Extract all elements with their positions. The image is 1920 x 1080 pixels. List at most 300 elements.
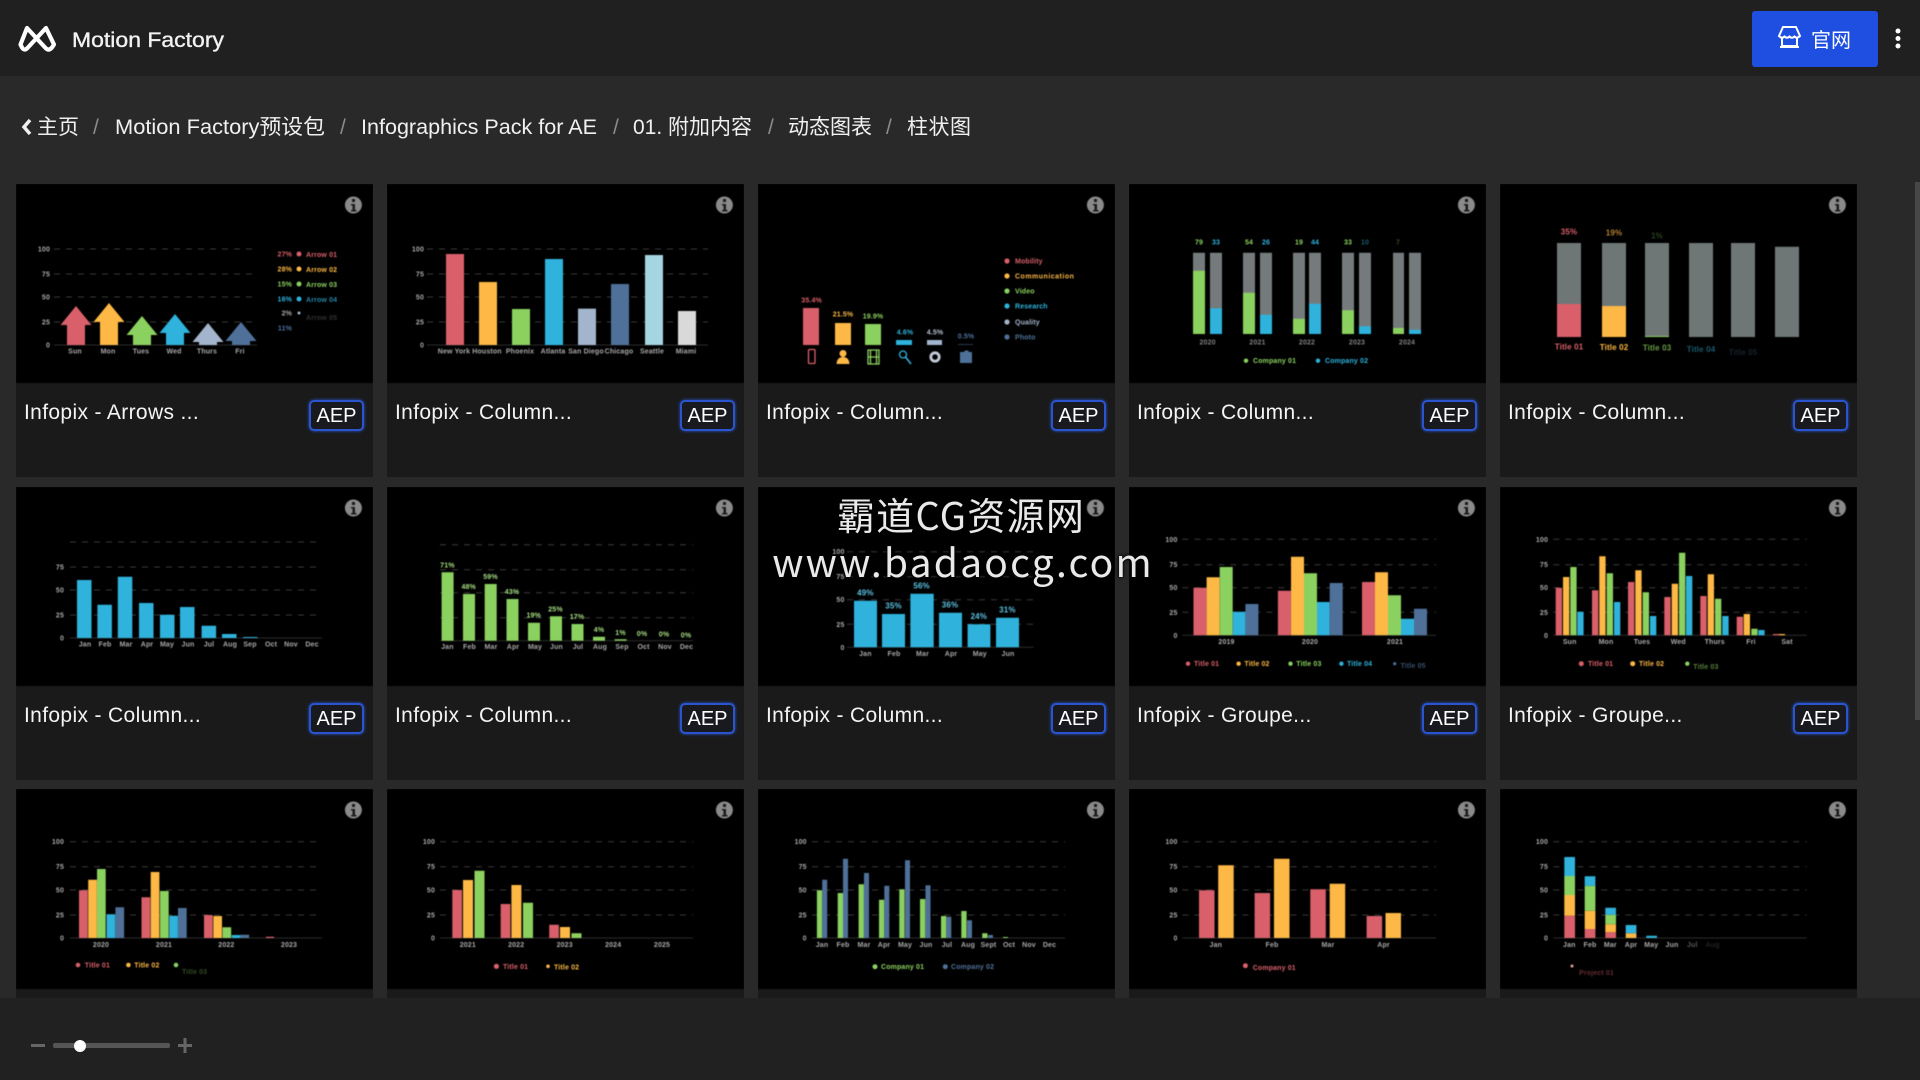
x axis labels: Fri [235, 348, 245, 356]
card: paired monthly columns [758, 789, 1115, 1080]
breadcrumb: 柱状图 [907, 116, 971, 139]
AEP badge [1051, 703, 1106, 734]
value labels: 10 [1361, 240, 1369, 246]
card: six-month blue columns [758, 487, 1115, 780]
month labels: Feb [1266, 942, 1278, 949]
percentage labels [857, 582, 1016, 621]
legend [1243, 963, 1296, 972]
thumbnail: paired progress columns by year [1129, 184, 1486, 383]
icon: info [1829, 500, 1846, 516]
y axis labels: 25 [42, 320, 50, 326]
percentage labels: 4.5% [927, 330, 944, 336]
month labels: Apr [1625, 942, 1637, 949]
y axis labels: 50 [427, 888, 435, 894]
y axis labels: 25 [416, 320, 424, 326]
card: grouped columns by year [1129, 487, 1486, 780]
month labels: Feb [1584, 942, 1596, 949]
percentage labels: 1% [615, 630, 626, 637]
legend: Photo [1015, 334, 1036, 342]
card: grouped columns by weekday [1500, 487, 1857, 780]
x axis labels: Miami [676, 348, 696, 356]
month labels: May [528, 644, 542, 651]
legend [1004, 258, 1074, 342]
y axis labels: 50 [416, 294, 424, 302]
legend: Title 01 [1194, 661, 1219, 668]
month labels: May [1644, 942, 1658, 949]
legend: Title 04 [1347, 661, 1372, 668]
legend [278, 252, 337, 332]
column titles: Title 02 [1600, 343, 1629, 352]
column titles: Title 04 [1687, 345, 1716, 354]
legend [1579, 661, 1719, 671]
percentage labels: 43% [505, 589, 520, 596]
month labels: Nov [658, 644, 672, 651]
y axis labels: 0 [431, 936, 435, 942]
legend: Quality [1015, 320, 1040, 326]
breadcrumb: 动态图表 [788, 116, 872, 139]
legend: Title 02 [1244, 661, 1270, 668]
grouped bars [1194, 557, 1427, 635]
month labels: Mar [916, 651, 929, 658]
year labels: 2022 [508, 942, 524, 949]
grouped bars [452, 871, 582, 938]
legend: Arrow 01 [306, 252, 337, 259]
legend [872, 964, 994, 971]
bars [442, 572, 627, 641]
y axis labels: 75 [416, 272, 424, 278]
month labels: May [160, 642, 174, 648]
month labels: Mar [858, 942, 871, 949]
thumbnail: monthly blue column chart [16, 487, 373, 686]
month labels: Aug [593, 644, 607, 651]
AEP badge [680, 400, 735, 431]
icon: info [716, 500, 733, 516]
legend: 28% [278, 266, 293, 274]
month labels: Feb [463, 644, 476, 651]
year labels: 2023 [557, 942, 573, 949]
percentage labels: 4.6% [897, 330, 914, 336]
y axis labels: 75 [56, 564, 64, 572]
AEP badge [309, 703, 364, 734]
value labels: 44 [1311, 240, 1319, 246]
legend: Title 02 [554, 964, 579, 971]
AEP badge: AEP [316, 405, 357, 427]
bars [854, 594, 1019, 647]
card: grouped columns 2020-2023 [16, 789, 373, 1080]
card title: Infopix - Column... [395, 401, 572, 424]
y axis labels: 0 [60, 636, 64, 642]
thumbnail: column chart with icons and legend [758, 184, 1115, 383]
legend [1244, 358, 1368, 365]
percentage labels: 0% [681, 632, 692, 640]
year labels: 2023 [281, 942, 297, 949]
month labels: Jul [204, 642, 214, 648]
legend: Arrow 05 [306, 315, 337, 322]
percentage labels [1561, 228, 1663, 240]
thumbnail: six-month blue column chart [758, 487, 1115, 686]
y axis labels: 0 [46, 342, 50, 350]
year labels: 2021 [156, 942, 172, 949]
month labels: Mar [1322, 942, 1335, 949]
y axis labels: 75 [1169, 562, 1178, 569]
AEP badge: AEP [1800, 708, 1841, 730]
thumbnail: column chart by city [387, 184, 744, 383]
value labels: 33 [1344, 240, 1352, 246]
month labels: Apr [507, 644, 519, 651]
legend: Title 02 [134, 962, 160, 970]
icon: info [716, 802, 733, 818]
day labels: Tues [1634, 639, 1650, 646]
card title: Infopix - Column... [1137, 401, 1314, 424]
x axis labels: New York [438, 348, 470, 356]
year labels [1218, 639, 1403, 646]
button label: 官网 [1811, 24, 1851, 53]
AEP badge: AEP [1800, 405, 1841, 427]
header bar [0, 0, 1920, 76]
column titles: Title 01 [1555, 342, 1584, 352]
legend [1570, 964, 1614, 977]
month labels: Jan [1210, 942, 1222, 949]
bars [1199, 859, 1401, 938]
month labels: Jun [1666, 942, 1678, 949]
month labels: Jul [1687, 942, 1698, 949]
card title: Infopix - Column... [1508, 401, 1685, 424]
percentage labels: 35% [885, 602, 902, 610]
icon: info [1087, 196, 1104, 214]
breadcrumb: 主页 [37, 116, 79, 139]
card title: Infopix - Groupe... [1137, 704, 1312, 727]
legend: Research [1015, 304, 1048, 310]
percentage labels: 59% [483, 574, 498, 581]
AEP badge [680, 703, 735, 734]
percentage labels: 35.4% [801, 298, 823, 304]
y axis labels: 100 [1536, 537, 1548, 544]
percentage labels: 19% [526, 612, 542, 620]
legend: Communication [1015, 274, 1074, 280]
icon: info [1458, 196, 1475, 214]
thumbnail: monthly green column chart [387, 487, 744, 686]
day labels: Thurs [1705, 639, 1725, 646]
icon: info [1458, 802, 1475, 818]
filled portions [1557, 304, 1669, 337]
y axis labels: 100 [423, 839, 435, 846]
day labels: Wed [1671, 639, 1686, 646]
x axis labels: Sun [68, 348, 82, 356]
y axis labels: 25 [1540, 912, 1548, 920]
icon: info [1087, 500, 1104, 516]
zoom plus [178, 1038, 192, 1053]
month labels: Nov [1022, 942, 1036, 949]
percentage labels: 21.5% [833, 312, 854, 318]
month labels: Sep [243, 642, 257, 648]
year labels: 2021 [1249, 340, 1266, 346]
y axis labels: 25 [427, 912, 435, 920]
y axis labels [38, 246, 50, 350]
column titles: Title 05 [1729, 348, 1758, 357]
watermark line 1: 霸道CG资源网 [837, 486, 1085, 541]
year labels: 2021 [1387, 639, 1403, 646]
icon: info [345, 196, 362, 214]
y axis labels: 0 [1544, 633, 1548, 640]
percentage labels: 71% [440, 562, 455, 570]
month labels: Feb [837, 942, 849, 949]
legend: Title 05 [1400, 663, 1426, 670]
company 02 fills [1210, 304, 1421, 334]
y axis labels: 0 [840, 645, 844, 652]
year labels [1200, 340, 1415, 346]
breadcrumb: / [93, 116, 99, 139]
breadcrumb: Motion Factory预设包 [115, 116, 325, 139]
slider thumb [74, 1040, 86, 1052]
breadcrumb: / [768, 116, 774, 139]
y axis labels: 0 [60, 936, 64, 942]
AEP badge: AEP [687, 405, 728, 427]
column titles: Title 03 [1643, 344, 1672, 352]
stacked bars [1564, 857, 1657, 938]
percentage labels: 36% [942, 600, 958, 610]
value labels: 54 [1245, 240, 1253, 246]
y axis labels [423, 839, 435, 942]
y axis labels: 75 [56, 864, 64, 871]
y axis labels: 25 [799, 912, 807, 920]
y axis labels: 25 [56, 912, 64, 920]
y axis labels: 25 [1169, 912, 1178, 920]
month labels [79, 642, 319, 648]
legend: Company 01 [881, 964, 924, 971]
y axis labels: 100 [1165, 537, 1178, 544]
legend: Project 01 [1579, 970, 1614, 977]
legend: Arrow 02 [306, 267, 337, 274]
y axis labels: 0 [803, 936, 807, 942]
zoom minus [31, 1044, 45, 1047]
legend: Title 03 [1296, 661, 1322, 668]
x axis labels [68, 348, 245, 356]
month labels: Jan [859, 651, 872, 658]
y axis labels: 100 [795, 839, 807, 846]
percentage labels: 31% [999, 606, 1016, 614]
AEP badge [1793, 400, 1848, 431]
value labels: 79 [1195, 240, 1203, 246]
column titles [1555, 342, 1758, 357]
icon: store [1778, 26, 1802, 48]
card: percentage column chart with icons [758, 184, 1115, 477]
month labels: Jan [816, 942, 828, 949]
grouped bars [79, 869, 274, 938]
thumbnail: arrow chart [16, 184, 373, 383]
icon: kebab menu [1896, 28, 1900, 48]
thumbnail: grouped column chart 2021-2025 [387, 789, 744, 989]
month labels: Jun [920, 942, 932, 949]
breadcrumb: / [886, 116, 892, 139]
day labels: Sun [1563, 639, 1577, 646]
year labels: 2022 [1299, 340, 1315, 346]
percentage labels [801, 298, 975, 340]
month labels: Sep [615, 644, 629, 651]
month labels: Aug [1706, 942, 1720, 949]
month labels [1210, 942, 1390, 949]
icon: info [345, 500, 362, 516]
thumbnail: grouped column chart by year [1129, 487, 1486, 686]
year labels: 2020 [1302, 639, 1318, 646]
icon: info [716, 196, 733, 214]
y axis labels [795, 839, 807, 942]
card: monthly blue columns [16, 487, 373, 780]
day labels [1563, 639, 1793, 646]
month labels [859, 651, 1014, 658]
x axis labels [438, 348, 696, 356]
legend: 2% [282, 310, 293, 318]
y axis labels: 0 [1173, 633, 1178, 640]
value labels: 19 [1295, 240, 1303, 246]
month labels [441, 644, 693, 651]
day labels: Fri [1746, 639, 1756, 646]
month labels: Oct [1003, 942, 1016, 949]
card: grouped columns 2021-2025 [387, 789, 744, 1080]
card title: Infopix - Groupe... [1508, 704, 1683, 727]
y axis labels: 100 [1165, 839, 1178, 846]
y axis labels: 50 [42, 294, 50, 302]
year labels: 2019 [1218, 639, 1235, 646]
year labels: 2022 [218, 942, 234, 949]
y axis labels: 50 [799, 888, 807, 894]
percentage labels: 0% [637, 631, 648, 638]
card title: Infopix - Column... [766, 401, 943, 424]
thumbnail: two-series column chart [1129, 789, 1486, 989]
y axis labels: 75 [836, 574, 844, 581]
AEP badge [309, 400, 364, 431]
y axis labels [56, 564, 64, 642]
month labels: Jun [182, 642, 194, 648]
breadcrumb: 01. 附加内容 [633, 116, 752, 139]
value labels: 33 [1212, 240, 1220, 246]
month labels: Jul [573, 644, 583, 651]
y axis labels: 50 [1540, 888, 1548, 894]
legend [1186, 661, 1426, 670]
legend [494, 964, 579, 971]
x axis labels: San Diego [568, 348, 604, 356]
AEP badge: AEP [1429, 405, 1470, 427]
y axis labels [1536, 537, 1548, 640]
icon: info [1458, 500, 1475, 516]
scrollbar [1915, 182, 1920, 720]
AEP badge [1051, 400, 1106, 431]
breadcrumb: / [340, 116, 346, 139]
zoom slider [53, 1043, 170, 1048]
legend: Title 01 [1588, 661, 1613, 668]
y axis labels: 50 [1169, 585, 1178, 592]
month labels: Jan [441, 644, 454, 651]
icon: Motion Factory logo [18, 26, 56, 52]
year labels [93, 942, 297, 949]
card title: Infopix - Column... [24, 704, 201, 727]
month labels: Dec [680, 644, 693, 651]
card: stacked columns [1500, 789, 1857, 1080]
bars [446, 254, 696, 345]
card title: Infopix - Arrows ... [24, 401, 199, 424]
arrows [60, 303, 256, 345]
x axis labels: Chicago [605, 348, 633, 356]
month labels [1563, 942, 1720, 949]
percentage labels: 25% [548, 606, 563, 614]
card title: Infopix - Column... [766, 704, 943, 727]
legend: 27% [278, 252, 293, 258]
grey column tracks [1557, 243, 1799, 337]
icon: info [1829, 196, 1846, 214]
legend: Arrow 04 [306, 297, 337, 304]
y axis labels [1165, 839, 1178, 942]
value labels [1195, 240, 1400, 246]
AEP badge: AEP [316, 708, 357, 730]
y axis labels: 100 [52, 839, 64, 846]
month labels: Oct [637, 644, 650, 651]
y axis labels: 75 [1540, 864, 1548, 871]
legend: 15% [278, 282, 293, 288]
company 01 fills [1193, 271, 1404, 334]
card title: Infopix - Column... [395, 704, 572, 727]
percentage labels: 48% [461, 584, 477, 591]
legend: Company 02 [951, 964, 994, 971]
y axis labels: 100 [38, 246, 50, 254]
x axis labels: Thurs [197, 348, 217, 356]
month labels: Jun [1002, 651, 1014, 658]
percentage labels: 0% [659, 631, 670, 638]
x axis labels: Houston [472, 348, 502, 356]
legend: Title 03 [182, 969, 207, 976]
year labels [460, 942, 670, 949]
x axis labels: Atlanta [541, 348, 565, 356]
x axis labels: Seattle [640, 348, 664, 356]
percentage labels: 24% [971, 612, 987, 621]
month labels: Sept [981, 942, 997, 949]
day labels: Sat [1781, 639, 1793, 646]
value labels: 26 [1262, 240, 1270, 246]
value labels: 7 [1396, 240, 1400, 246]
year labels: 2024 [605, 942, 621, 949]
AEP badge: AEP [1429, 708, 1470, 730]
year labels: 2025 [654, 942, 670, 949]
legend: Video [1015, 288, 1035, 296]
breadcrumb: / [613, 116, 619, 139]
legend: Title 03 [1693, 664, 1719, 671]
icon: info [1829, 802, 1846, 818]
card: paired progress columns [1129, 184, 1486, 477]
percentage labels [440, 562, 692, 640]
y axis labels: 0 [1173, 936, 1178, 942]
month labels: May [973, 651, 987, 658]
AEP badge: AEP [687, 708, 728, 730]
month labels: Apr [141, 642, 153, 648]
y axis labels [52, 839, 64, 942]
icon: info [1087, 802, 1104, 818]
thumbnail: grouped column chart by weekday [1500, 487, 1857, 686]
y axis labels: 50 [56, 888, 64, 894]
y axis labels: 75 [42, 272, 50, 278]
percentage labels: 19% [1606, 228, 1622, 238]
grouped bars [1556, 553, 1785, 635]
month labels: Apr [945, 651, 957, 658]
percentage labels: 1% [1651, 232, 1663, 240]
month labels: Aug [961, 942, 975, 949]
legend: Title 01 [85, 962, 110, 970]
month labels: Mar [485, 644, 498, 651]
AEP badge [1793, 703, 1848, 734]
percentage labels: 35% [1561, 228, 1577, 236]
day labels: Mon [1599, 639, 1613, 646]
y axis labels: 100 [412, 246, 424, 254]
icon: info [345, 802, 362, 818]
breadcrumb [22, 116, 971, 139]
x axis labels: Mon [101, 348, 115, 356]
